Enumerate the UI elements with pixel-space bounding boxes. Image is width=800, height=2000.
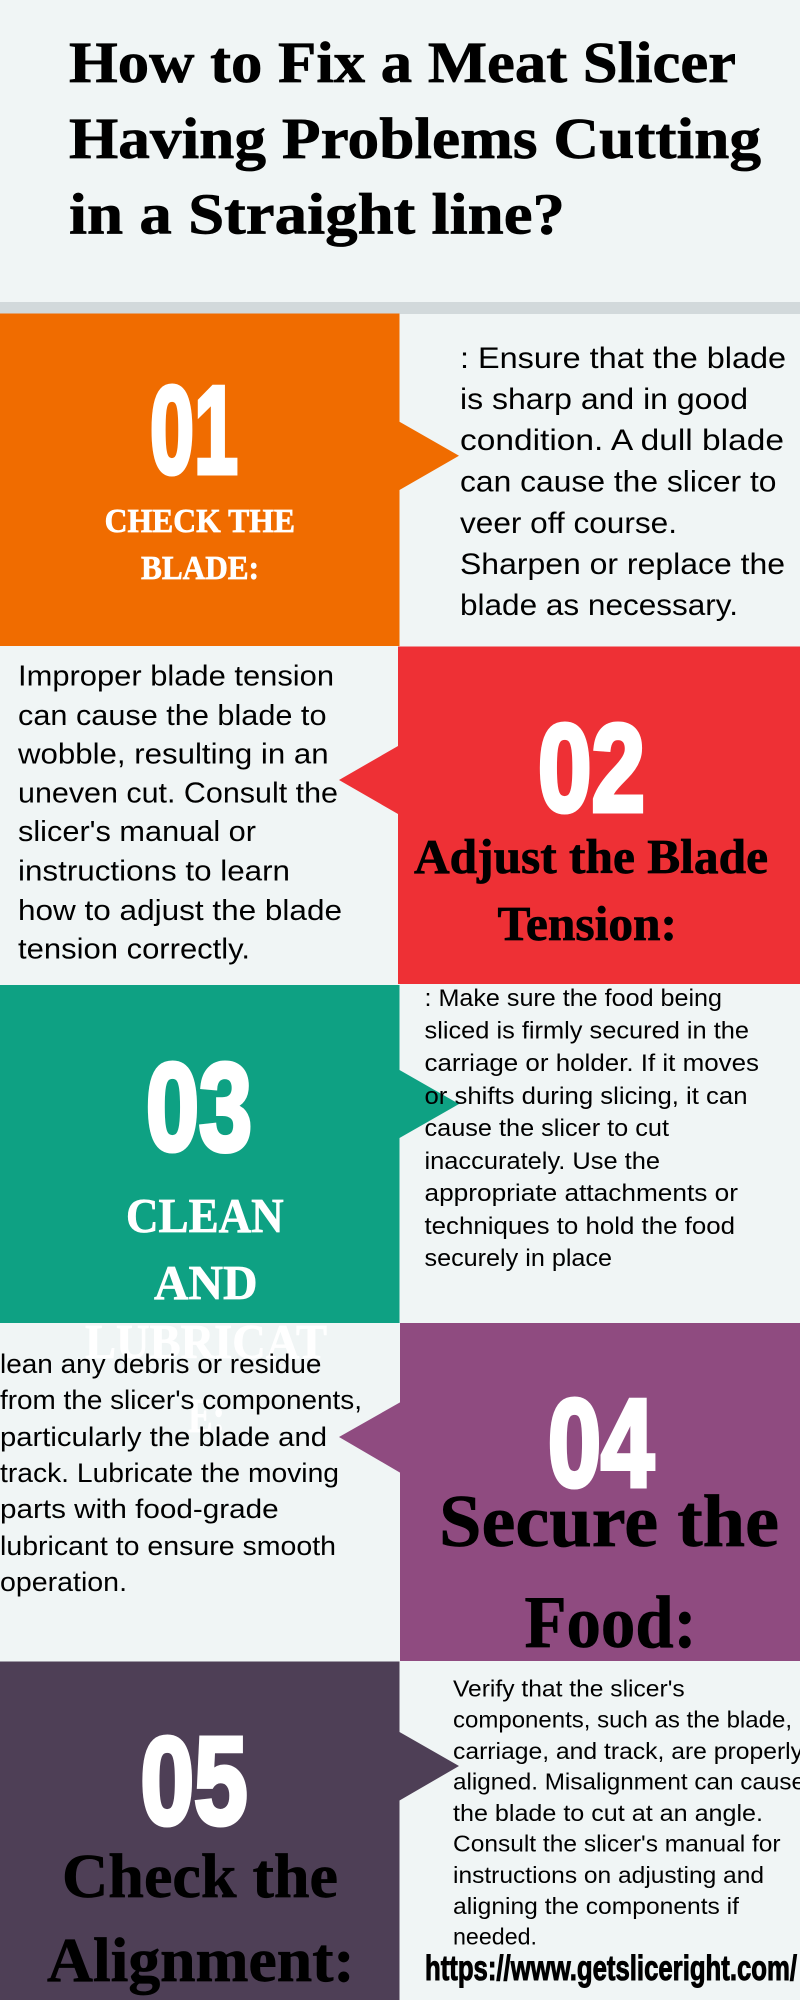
step 5 body text: aligned. Misalignment can cause: [453, 1769, 800, 1795]
step 5 body text: components, such as the blade,: [453, 1707, 792, 1733]
step 1 body text: blade as necessary.: [460, 589, 738, 622]
step 4 body text: [0, 1349, 362, 1597]
panel: step 1 check the blade: [0, 314, 786, 646]
step 5 heading: Alignment:: [47, 1927, 355, 1995]
step 4 body text: lubricant to ensure smooth: [0, 1531, 336, 1561]
step 1 heading: [105, 503, 295, 587]
step 4 body text: lean any debris or residue: [0, 1349, 321, 1379]
step 5 body text: instructions on adjusting and: [453, 1862, 764, 1888]
step 1 body text: condition. A dull blade: [460, 424, 784, 457]
step 2 body text: wobble, resulting in an: [17, 739, 329, 771]
step 1 orange block with arrow: [0, 314, 459, 646]
step 1 body text: veer off course.: [460, 507, 677, 540]
step 3 body text: sliced is firmly secured in the: [424, 1018, 749, 1045]
step 1 body text: [460, 342, 786, 622]
step 4 body text: operation.: [0, 1567, 127, 1597]
step 5 body text: aligning the components if: [453, 1893, 739, 1919]
step 2 body text: how to adjust the blade: [18, 895, 342, 927]
step 3 heading: CLEAN: [126, 1188, 284, 1243]
title: How to Fix a Meat Slicer: [69, 30, 736, 95]
step 5 body text: needed.: [453, 1924, 537, 1950]
title: in a Straight line?: [69, 182, 565, 246]
step 3 body text: techniques to hold the food: [424, 1213, 735, 1240]
title: Having Problems Cutting: [69, 106, 761, 171]
step 4 number: 04: [548, 1375, 654, 1513]
step 2 body text: slicer's manual or: [18, 816, 257, 848]
step 3 body text: cause the slicer to cut: [424, 1115, 669, 1142]
step 4 purple block with arrow: [339, 1323, 800, 1661]
step 1 body text: can cause the slicer to: [460, 466, 776, 498]
step 4 body text: particularly the blade and: [0, 1422, 327, 1452]
panel: step 5 check the alignment: [0, 1662, 800, 2000]
step 4 body text: parts with food-grade: [0, 1494, 279, 1524]
step 1 body text: Sharpen or replace the: [460, 548, 785, 581]
step 2 body text: [17, 660, 342, 966]
step 2 heading: Tension:: [498, 896, 677, 951]
step 2 body text: Improper blade tension: [18, 660, 334, 692]
step 3 body text: appropriate attachments or: [424, 1180, 738, 1207]
panel: step 3 clean and lubricate: [0, 985, 759, 1443]
step 5 heading: [47, 1843, 355, 1995]
step 5 body text: [453, 1675, 800, 1950]
step 5 dark block with arrow: [0, 1662, 459, 2000]
step 5 body text: Verify that the slicer's: [453, 1675, 685, 1701]
step 2 heading: Adjust the Blade: [414, 829, 768, 884]
step 1 number: 01: [150, 362, 238, 500]
step 4 body text: track. Lubricate the moving: [0, 1458, 339, 1488]
step 3 body text: : Make sure the food being: [424, 985, 722, 1012]
step 4 heading: Secure the: [439, 1481, 779, 1563]
step 5 body text: the blade to cut at an angle.: [453, 1800, 763, 1826]
step 5 number: 05: [140, 1713, 248, 1851]
step 3 teal block with arrow: [0, 985, 459, 1323]
step 4 heading: [439, 1481, 779, 1664]
step 5 body text: carriage, and track, are properly: [453, 1738, 800, 1764]
step 1 heading: BLADE:: [141, 550, 259, 587]
panel: step 4 secure the food: [0, 1323, 800, 1664]
step 2 body text: uneven cut. Consult the: [18, 778, 338, 810]
step 3 body text: or shifts during slicing, it can: [424, 1083, 748, 1110]
step 3 body text: [424, 985, 759, 1272]
step 1 body text: is sharp and in good: [460, 383, 748, 416]
step 1 heading: CHECK THE: [105, 503, 295, 540]
step 2 body text: can cause the blade to: [18, 700, 326, 732]
step 3 number: 03: [146, 1039, 252, 1177]
step 3 heading: AND: [154, 1255, 258, 1310]
step 3 heading: E:: [188, 1388, 225, 1443]
step 1 body text: : Ensure that the blade: [460, 342, 786, 375]
step 4 body text: from the slicer's components,: [0, 1385, 362, 1415]
step 3 body text: carriage or holder. If it moves: [424, 1050, 759, 1077]
step 2 number: 02: [538, 700, 645, 838]
step 5 body text: Consult the slicer's manual for: [453, 1831, 781, 1857]
step 5 heading: Check the: [62, 1843, 338, 1911]
step 3 body text: securely in place: [424, 1245, 612, 1272]
title: [69, 30, 761, 246]
step 3 heading: [85, 1188, 327, 1443]
step 2 red block with arrow: [339, 646, 800, 984]
step 2 body text: instructions to learn: [18, 856, 290, 888]
step 2 heading: [414, 829, 768, 951]
step 4 heading: Food:: [524, 1582, 696, 1664]
panel: step 2 adjust the blade tension: [17, 646, 800, 984]
step 2 body text: tension correctly.: [18, 934, 250, 966]
step 3 body text: inaccurately. Use the: [424, 1148, 660, 1175]
step 3 heading: LUBRICAT: [85, 1314, 327, 1369]
